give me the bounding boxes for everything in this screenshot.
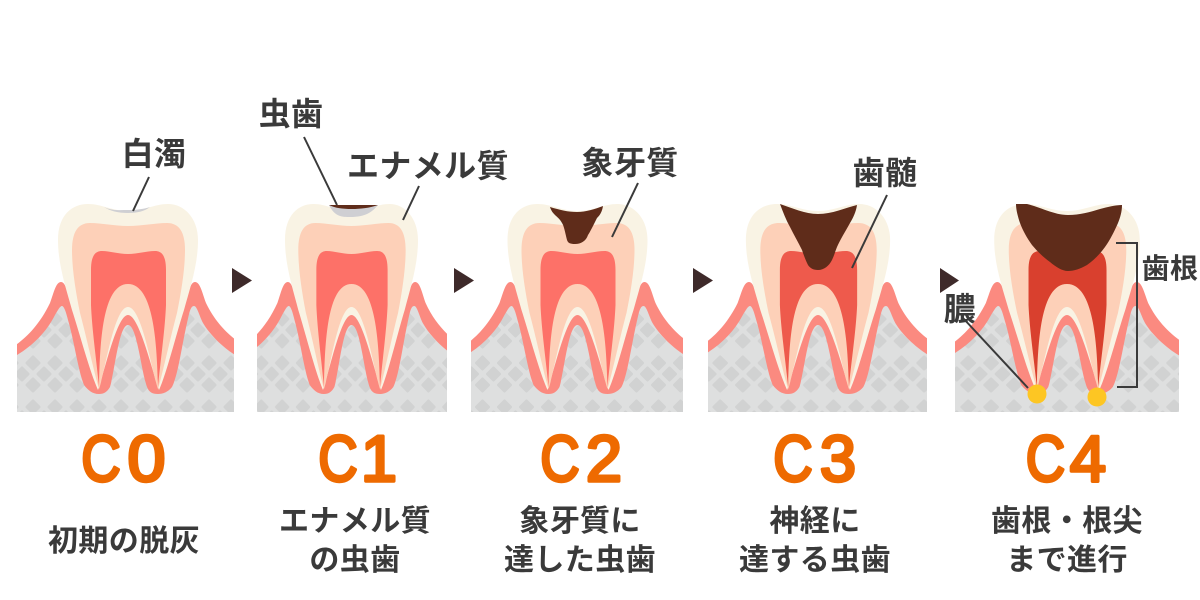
caption: C3 <box>739 505 891 577</box>
label: enamel <box>347 148 509 220</box>
caption: C4: まで進行 <box>1006 544 1128 577</box>
panel: C3 pulp caries <box>708 156 927 573</box>
stage name: C1: C <box>318 423 358 495</box>
caption: C3: 達する虫歯 <box>739 544 891 577</box>
stage name: C0: 0 <box>128 423 165 496</box>
caption: C1 <box>279 505 431 577</box>
panel: C1 enamel caries <box>238 96 509 577</box>
icon: pus spots <box>1028 384 1106 406</box>
label: dentin: 象牙質 <box>581 145 679 181</box>
stage name: C3 <box>773 422 856 495</box>
label: root bracket: 歯根 <box>1142 253 1198 284</box>
stage name: C2: C <box>540 423 580 495</box>
illustration: C1 tooth <box>257 204 447 412</box>
panel: C2 dentin caries <box>471 146 683 573</box>
label: pus <box>944 291 1028 388</box>
stage name: C3: 3 <box>820 422 856 495</box>
stage name: C4: C <box>1026 423 1065 495</box>
illustration: C0 tooth <box>17 204 234 412</box>
stage name: C1: 1 <box>361 422 397 495</box>
arrow: C0 to C1 <box>232 268 252 293</box>
stage name: C2 <box>540 422 622 495</box>
caption: C4 <box>991 505 1143 577</box>
caption: C2: 達した虫歯 <box>504 544 656 577</box>
label: pulp: 歯髄 <box>853 155 917 191</box>
label: root bracket <box>1116 243 1198 387</box>
illustration: C2 tooth <box>471 204 683 412</box>
label: cavity <box>259 96 337 205</box>
caption: C3: 神経に <box>769 505 861 538</box>
caption: C2 <box>504 505 656 577</box>
panel: C4 root caries <box>942 204 1198 577</box>
label: pulp <box>852 155 917 268</box>
illustration: C3 tooth <box>708 204 927 412</box>
arrow: C3 to C4 <box>940 268 959 293</box>
label: cavity: 虫歯 <box>259 96 323 132</box>
caption: C1: の虫歯 <box>309 544 401 577</box>
caption: C0: 初期の脱灰 <box>48 525 200 558</box>
stage name: C3: C <box>773 423 813 495</box>
illustration: C4 tooth <box>955 204 1179 412</box>
label: white spot <box>122 136 186 211</box>
stage name: C0 <box>81 423 165 496</box>
label: enamel: エナメル質 <box>347 148 509 184</box>
panel: C0 initial demineralization <box>17 138 234 554</box>
label: white spot: 白濁 <box>122 136 186 172</box>
stage name: C4 <box>1026 422 1106 495</box>
arrow: C2 to C3 <box>693 268 713 293</box>
arrow: C1 to C2 <box>454 268 474 293</box>
stage name: C0: C <box>81 423 121 495</box>
label: pus: 膿 <box>944 291 976 327</box>
caption: C2: 象牙質に <box>519 505 641 538</box>
caption: C4: 歯根・根尖 <box>991 505 1143 538</box>
stage name: C4: 4 <box>1070 422 1106 495</box>
label: dentin <box>581 145 679 237</box>
caption: C1: エナメル質 <box>279 505 431 538</box>
stage name: C1 <box>318 422 397 495</box>
stage name: C2: 2 <box>586 422 622 495</box>
